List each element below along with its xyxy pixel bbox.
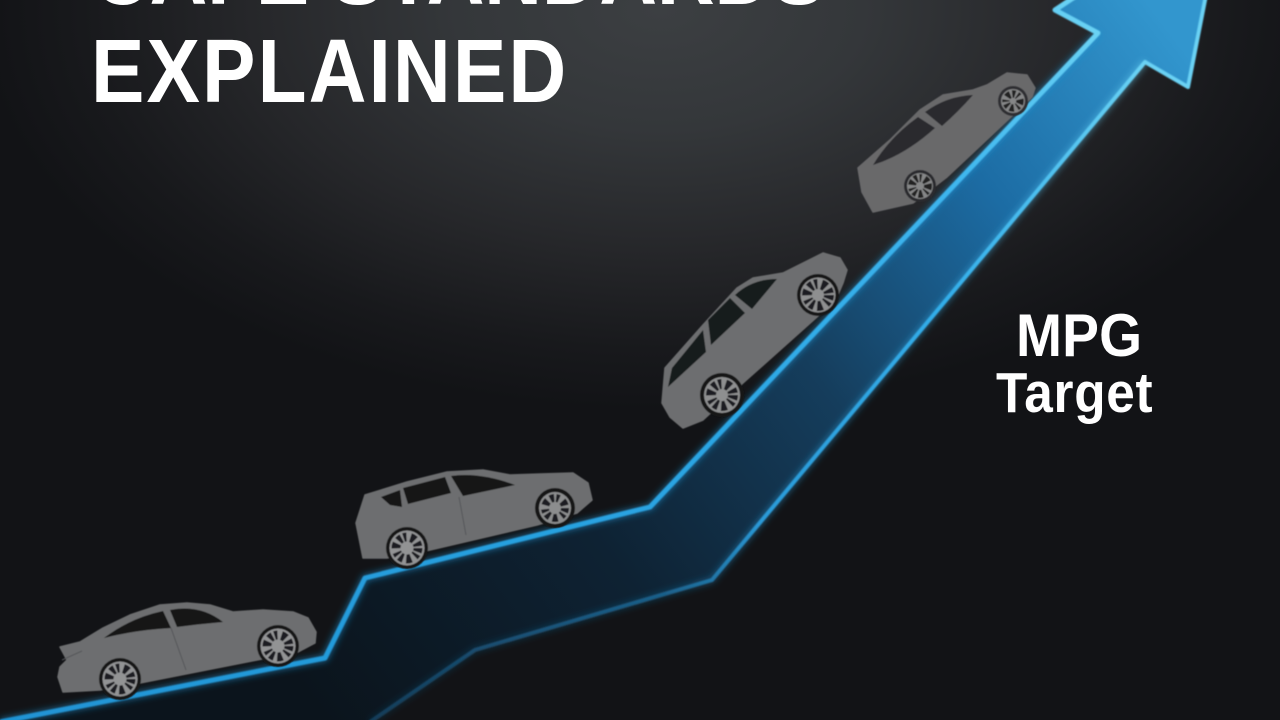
car 4: compact xyxy=(858,73,1035,212)
car 2: hatchback xyxy=(356,470,592,569)
title: EXPLAINED xyxy=(91,22,566,122)
label: MPG Target xyxy=(996,303,1153,425)
title xyxy=(91,0,825,122)
car 1: sedan xyxy=(58,603,316,700)
car 3: SUV xyxy=(662,253,847,428)
label: MPG Target: MPG xyxy=(1016,303,1142,370)
label: MPG Target: Target xyxy=(996,362,1153,425)
